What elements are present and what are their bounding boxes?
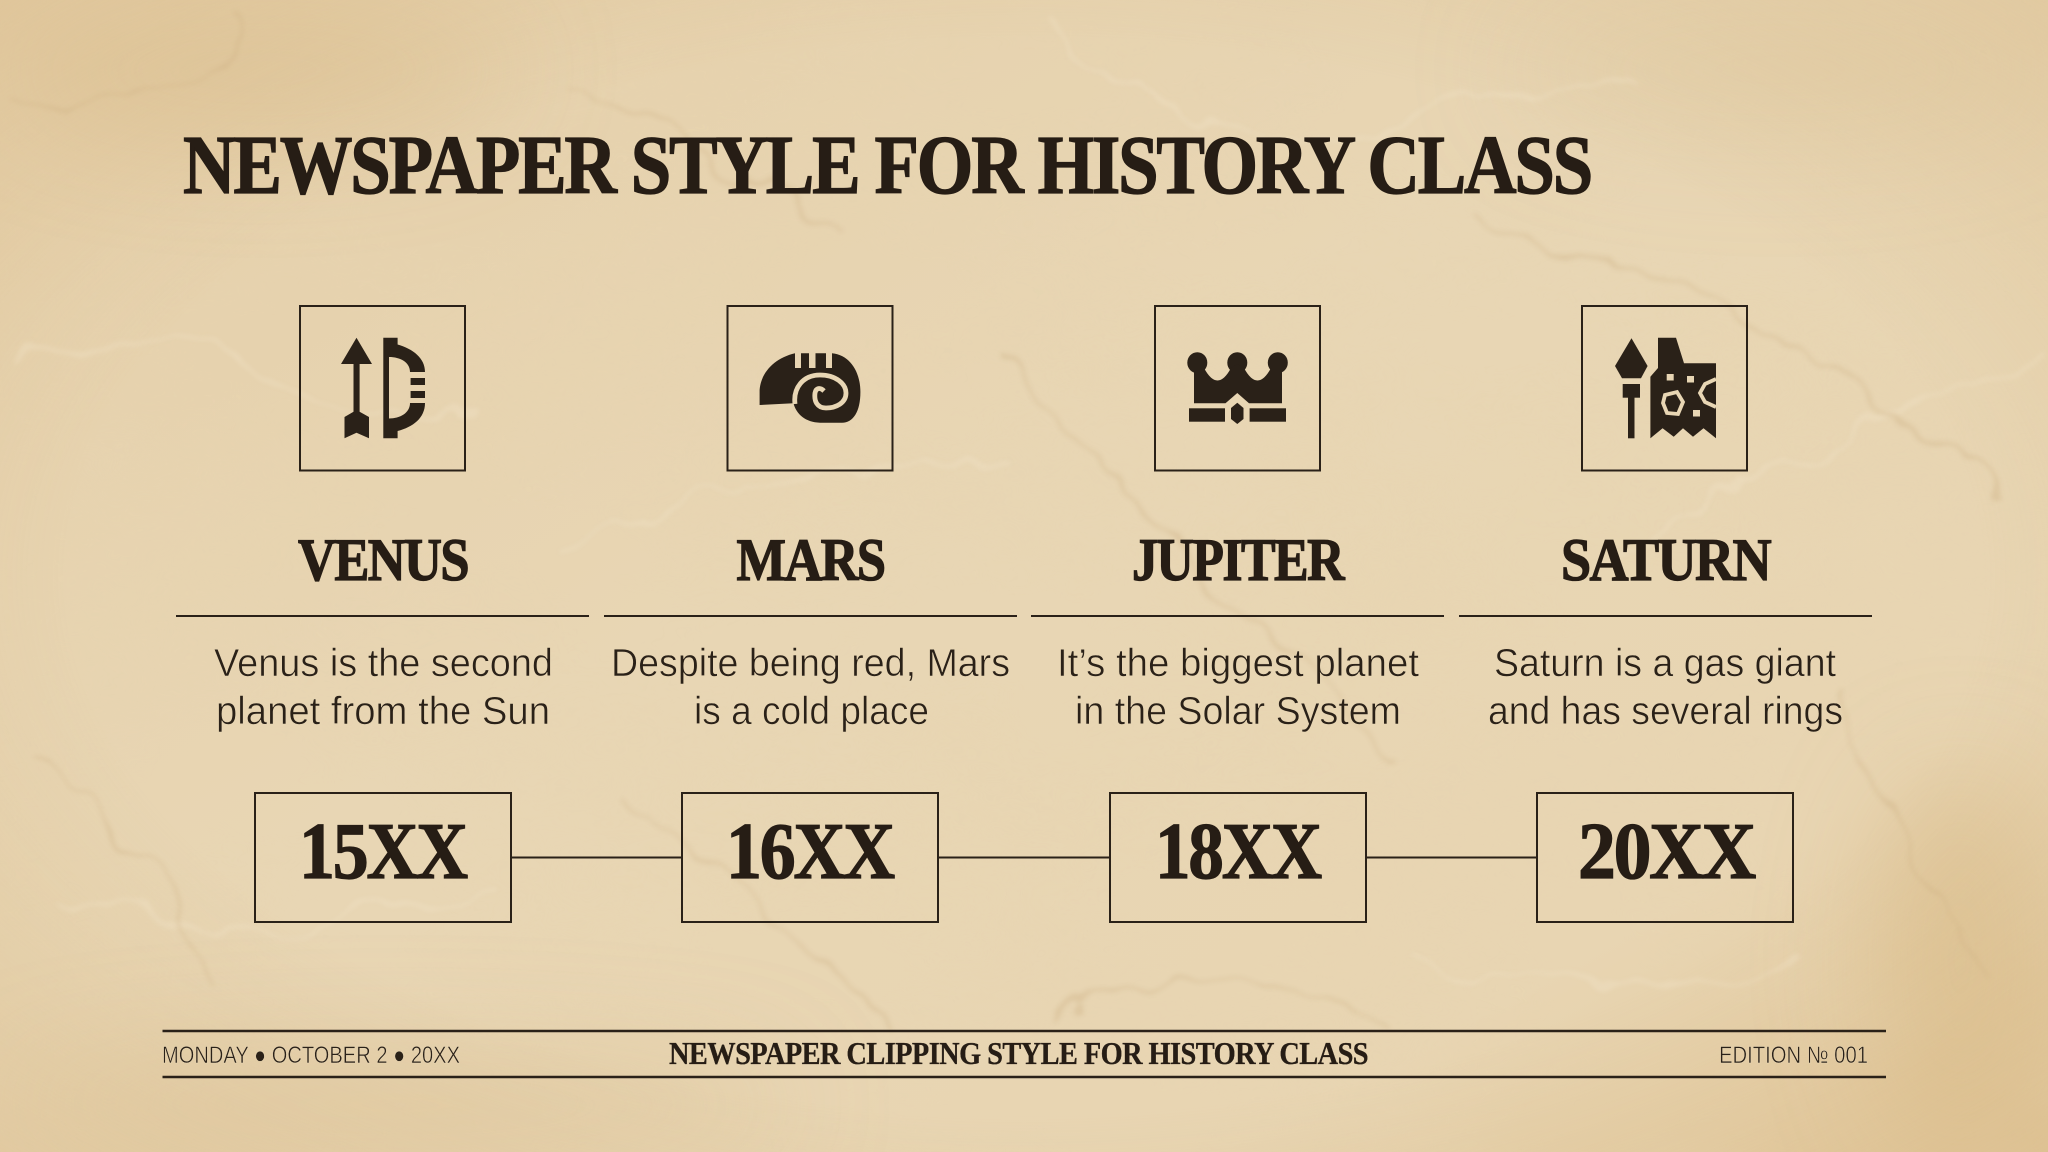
description: venus: planet from the Sun [216,690,550,733]
description: mars: Despite being red, Mars [611,642,1010,685]
panel: saturn [1459,306,1872,922]
panel: jupiter [1031,306,1444,922]
description: jupiter: It’s the biggest planet [1057,642,1419,685]
heading: venus: VENUS [298,527,468,593]
icon box: mars shell [728,306,892,470]
description: venus: Venus is the second [214,642,553,685]
footer date: MONDAY ● OCTOBER 2 ● 20XX [162,1042,460,1069]
year box: 15XX: 15XX [299,808,467,896]
year box: 18XX: 18XX [1155,808,1321,896]
footer bar [162,1031,1886,1077]
year box: 18XX [1110,793,1366,922]
icon box: saturn spear and castle [1582,306,1747,470]
icon box: venus bow and arrow [300,306,465,470]
description: saturn: Saturn is a gas giant [1494,642,1836,685]
heading: saturn: SATURN [1561,527,1771,593]
year box: 16XX [682,793,938,922]
year box: 15XX [255,793,511,922]
panel: venus [176,306,589,922]
icon box: jupiter crown [1155,306,1320,470]
description: jupiter: in the Solar System [1075,690,1401,733]
year box: 20XX: 20XX [1578,808,1756,896]
heading: mars: MARS [736,527,884,593]
heading: jupiter: JUPITER [1132,527,1345,593]
year box: 16XX: 16XX [726,808,894,896]
timeline connectors [511,856,1537,858]
panel: mars [604,306,1017,922]
footer center title: NEWSPAPER CLIPPING STYLE FOR HISTORY CLASS [669,1035,1368,1071]
title: NEWSPAPER STYLE FOR HISTORY CLASS [183,119,1591,212]
footer edition: EDITION № 001 [1719,1042,1868,1069]
description: saturn: and has several rings [1488,690,1843,733]
year box: 20XX [1537,793,1793,922]
description: mars: is a cold place [694,690,929,733]
